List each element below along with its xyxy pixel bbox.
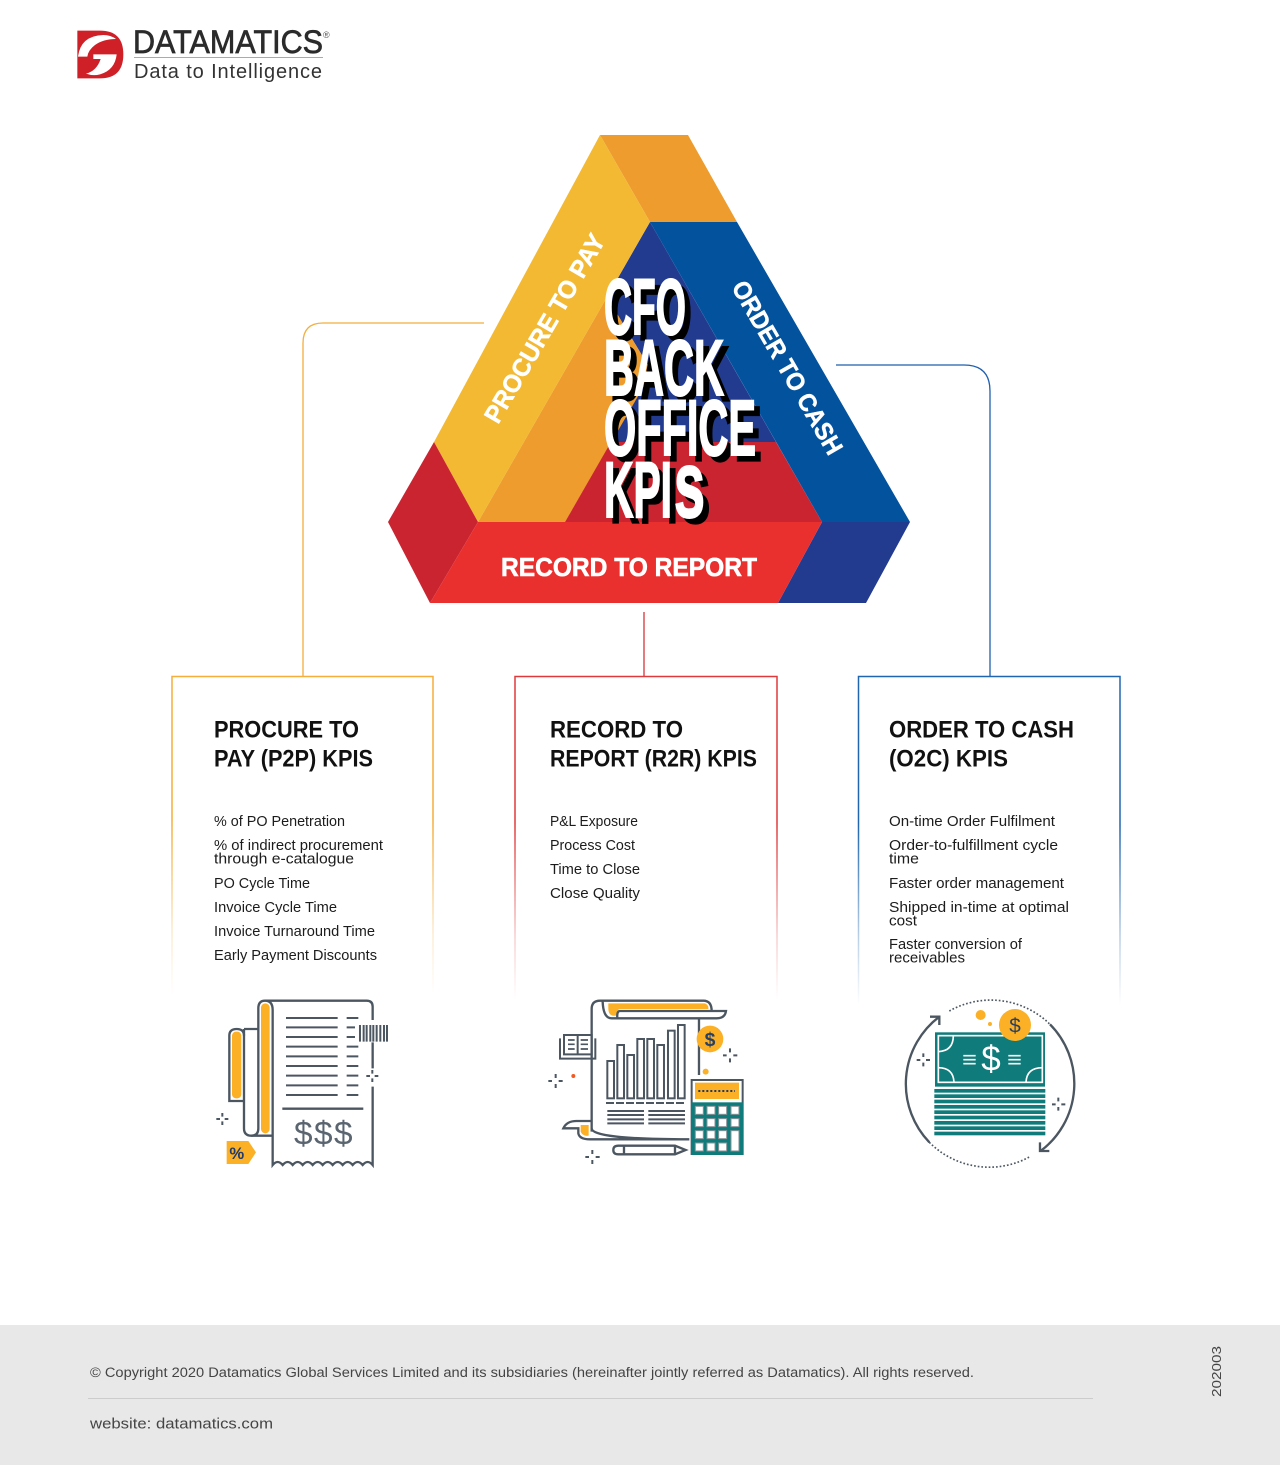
barcode xyxy=(360,1025,387,1042)
band: record to report: RECORD TO REPORT xyxy=(501,554,757,582)
title: CFO back office KPIs: s xyxy=(680,438,711,544)
band: order to cash: ORDER TO CASH xyxy=(726,276,848,460)
list: P2P KPIs: PO Cycle Time xyxy=(214,876,310,892)
panel: record to report KPIs xyxy=(515,676,777,1000)
banknote xyxy=(935,1032,1045,1087)
dollar signs: $ xyxy=(294,1115,313,1152)
list: O2C KPIs: Faster order management xyxy=(889,876,1064,892)
list: O2C KPIs xyxy=(889,814,1069,966)
list: O2C KPIs: On-time Order Fulfilment xyxy=(889,814,1055,830)
list: R2R KPIs xyxy=(550,814,641,902)
connector: procure to pay xyxy=(303,323,484,676)
title: CFO back office KPIs: KPI xyxy=(610,451,678,540)
heading: P2P: PROCURE TO xyxy=(214,716,359,744)
stack of notes xyxy=(934,1089,1045,1135)
heading: O2C: (O2C) KPIS xyxy=(889,746,1008,772)
banknote: $ xyxy=(981,1039,1001,1078)
icon: calculator xyxy=(691,1080,743,1155)
cycle arrows xyxy=(906,1000,1074,1167)
band: record to report xyxy=(430,522,822,603)
heading: R2R: REPORT (R2R) KPIS xyxy=(550,746,757,772)
band: order to cash xyxy=(650,222,910,522)
list: R2R KPIs: Close Quality xyxy=(550,886,641,902)
list: P2P KPIs: through e-catalogue xyxy=(214,852,354,868)
icon: receipt xyxy=(216,1001,387,1165)
list: O2C KPIs: cost xyxy=(889,914,917,930)
coin xyxy=(999,1009,1031,1041)
title: CFO back office KPIs: OFFICE xyxy=(604,383,756,472)
panel: order to cash KPIs xyxy=(858,676,1120,1005)
logo tagline: Data to Intelligence xyxy=(134,61,322,83)
list: P2P KPIs: Invoice Cycle Time xyxy=(214,900,337,916)
list: P2P KPIs: Invoice Turnaround Time xyxy=(214,924,375,940)
heading: P2P xyxy=(214,716,373,772)
list: P2P KPIs xyxy=(214,814,383,964)
icon: money cycle xyxy=(906,1000,1074,1167)
band: procure to pay xyxy=(434,135,650,522)
list: O2C KPIs: Faster conversion of xyxy=(889,937,1023,953)
band: procure to pay: PROCURE TO PAY xyxy=(479,229,611,428)
list: O2C KPIs: Order-to-fulfillment cycle xyxy=(889,838,1058,854)
icon: dollar coin: $ xyxy=(705,1030,716,1051)
heading: O2C: ORDER TO CASH xyxy=(889,716,1074,744)
dollar signs: $ xyxy=(314,1115,333,1152)
price tag xyxy=(227,1141,256,1164)
heading: R2R xyxy=(550,716,757,772)
corner: dark red xyxy=(388,442,478,603)
connector: record to report xyxy=(643,612,645,676)
title: CFO back office KPIs: s xyxy=(674,432,705,538)
triangle graphic xyxy=(388,135,910,603)
list: P2P KPIs: % of indirect procurement xyxy=(214,838,383,854)
logo: Datamatics xyxy=(77,24,330,83)
heading: R2R: RECORD TO xyxy=(550,716,683,744)
coin: $ xyxy=(1009,1015,1021,1038)
document code: 202003 xyxy=(1209,1346,1224,1397)
list: P2P KPIs: % of PO Penetration xyxy=(214,814,345,830)
list: O2C KPIs: receivables xyxy=(889,950,965,966)
title: CFO back office KPIs: KPI xyxy=(604,445,672,534)
list: P2P KPIs: Early Payment Discounts xyxy=(214,948,377,964)
heading: O2C xyxy=(889,716,1074,772)
footer xyxy=(0,1325,1280,1465)
dollar signs xyxy=(294,1115,353,1152)
logo wordmark: DATAMATICS xyxy=(133,24,323,60)
website: website: datamatics.com xyxy=(89,1416,273,1432)
icon: pencil xyxy=(613,1146,686,1154)
title: CFO back office KPIs: BACK xyxy=(610,329,730,418)
price tag: % xyxy=(229,1144,244,1163)
bar chart xyxy=(607,1025,685,1098)
dollar signs: $ xyxy=(334,1115,353,1152)
connector: order to cash xyxy=(836,365,990,676)
logo mark xyxy=(77,31,123,78)
title: CFO back office KPIs: CFO xyxy=(610,268,692,357)
icon: report and calculator xyxy=(548,1001,743,1164)
panel: procure to pay KPIs xyxy=(172,676,433,995)
list: O2C KPIs: time xyxy=(889,852,919,868)
title: CFO back office KPIs: OFFICE xyxy=(610,389,762,478)
list: R2R KPIs: P&L Exposure xyxy=(550,814,638,830)
list: R2R KPIs: Time to Close xyxy=(550,862,640,878)
copyright: © Copyright 2020 Datamatics Global Services Limited and its subsidiaries (hereinafter jointly referred as Datamatics). All rights reserved. xyxy=(90,1365,974,1380)
corner: dark blue xyxy=(778,522,910,603)
list: O2C KPIs: Shipped in-time at optimal xyxy=(889,900,1069,916)
icon: book xyxy=(560,1035,595,1059)
title: CFO back office KPIs: CFO xyxy=(604,262,686,351)
title: CFO back office KPIs xyxy=(604,262,762,544)
registered mark: ® xyxy=(323,30,330,40)
icon: dollar coin xyxy=(697,1026,723,1052)
heading: P2P: PAY (P2P) KPIS xyxy=(214,746,373,772)
list: R2R KPIs: Process Cost xyxy=(550,838,635,854)
title: CFO back office KPIs: BACK xyxy=(604,323,724,412)
